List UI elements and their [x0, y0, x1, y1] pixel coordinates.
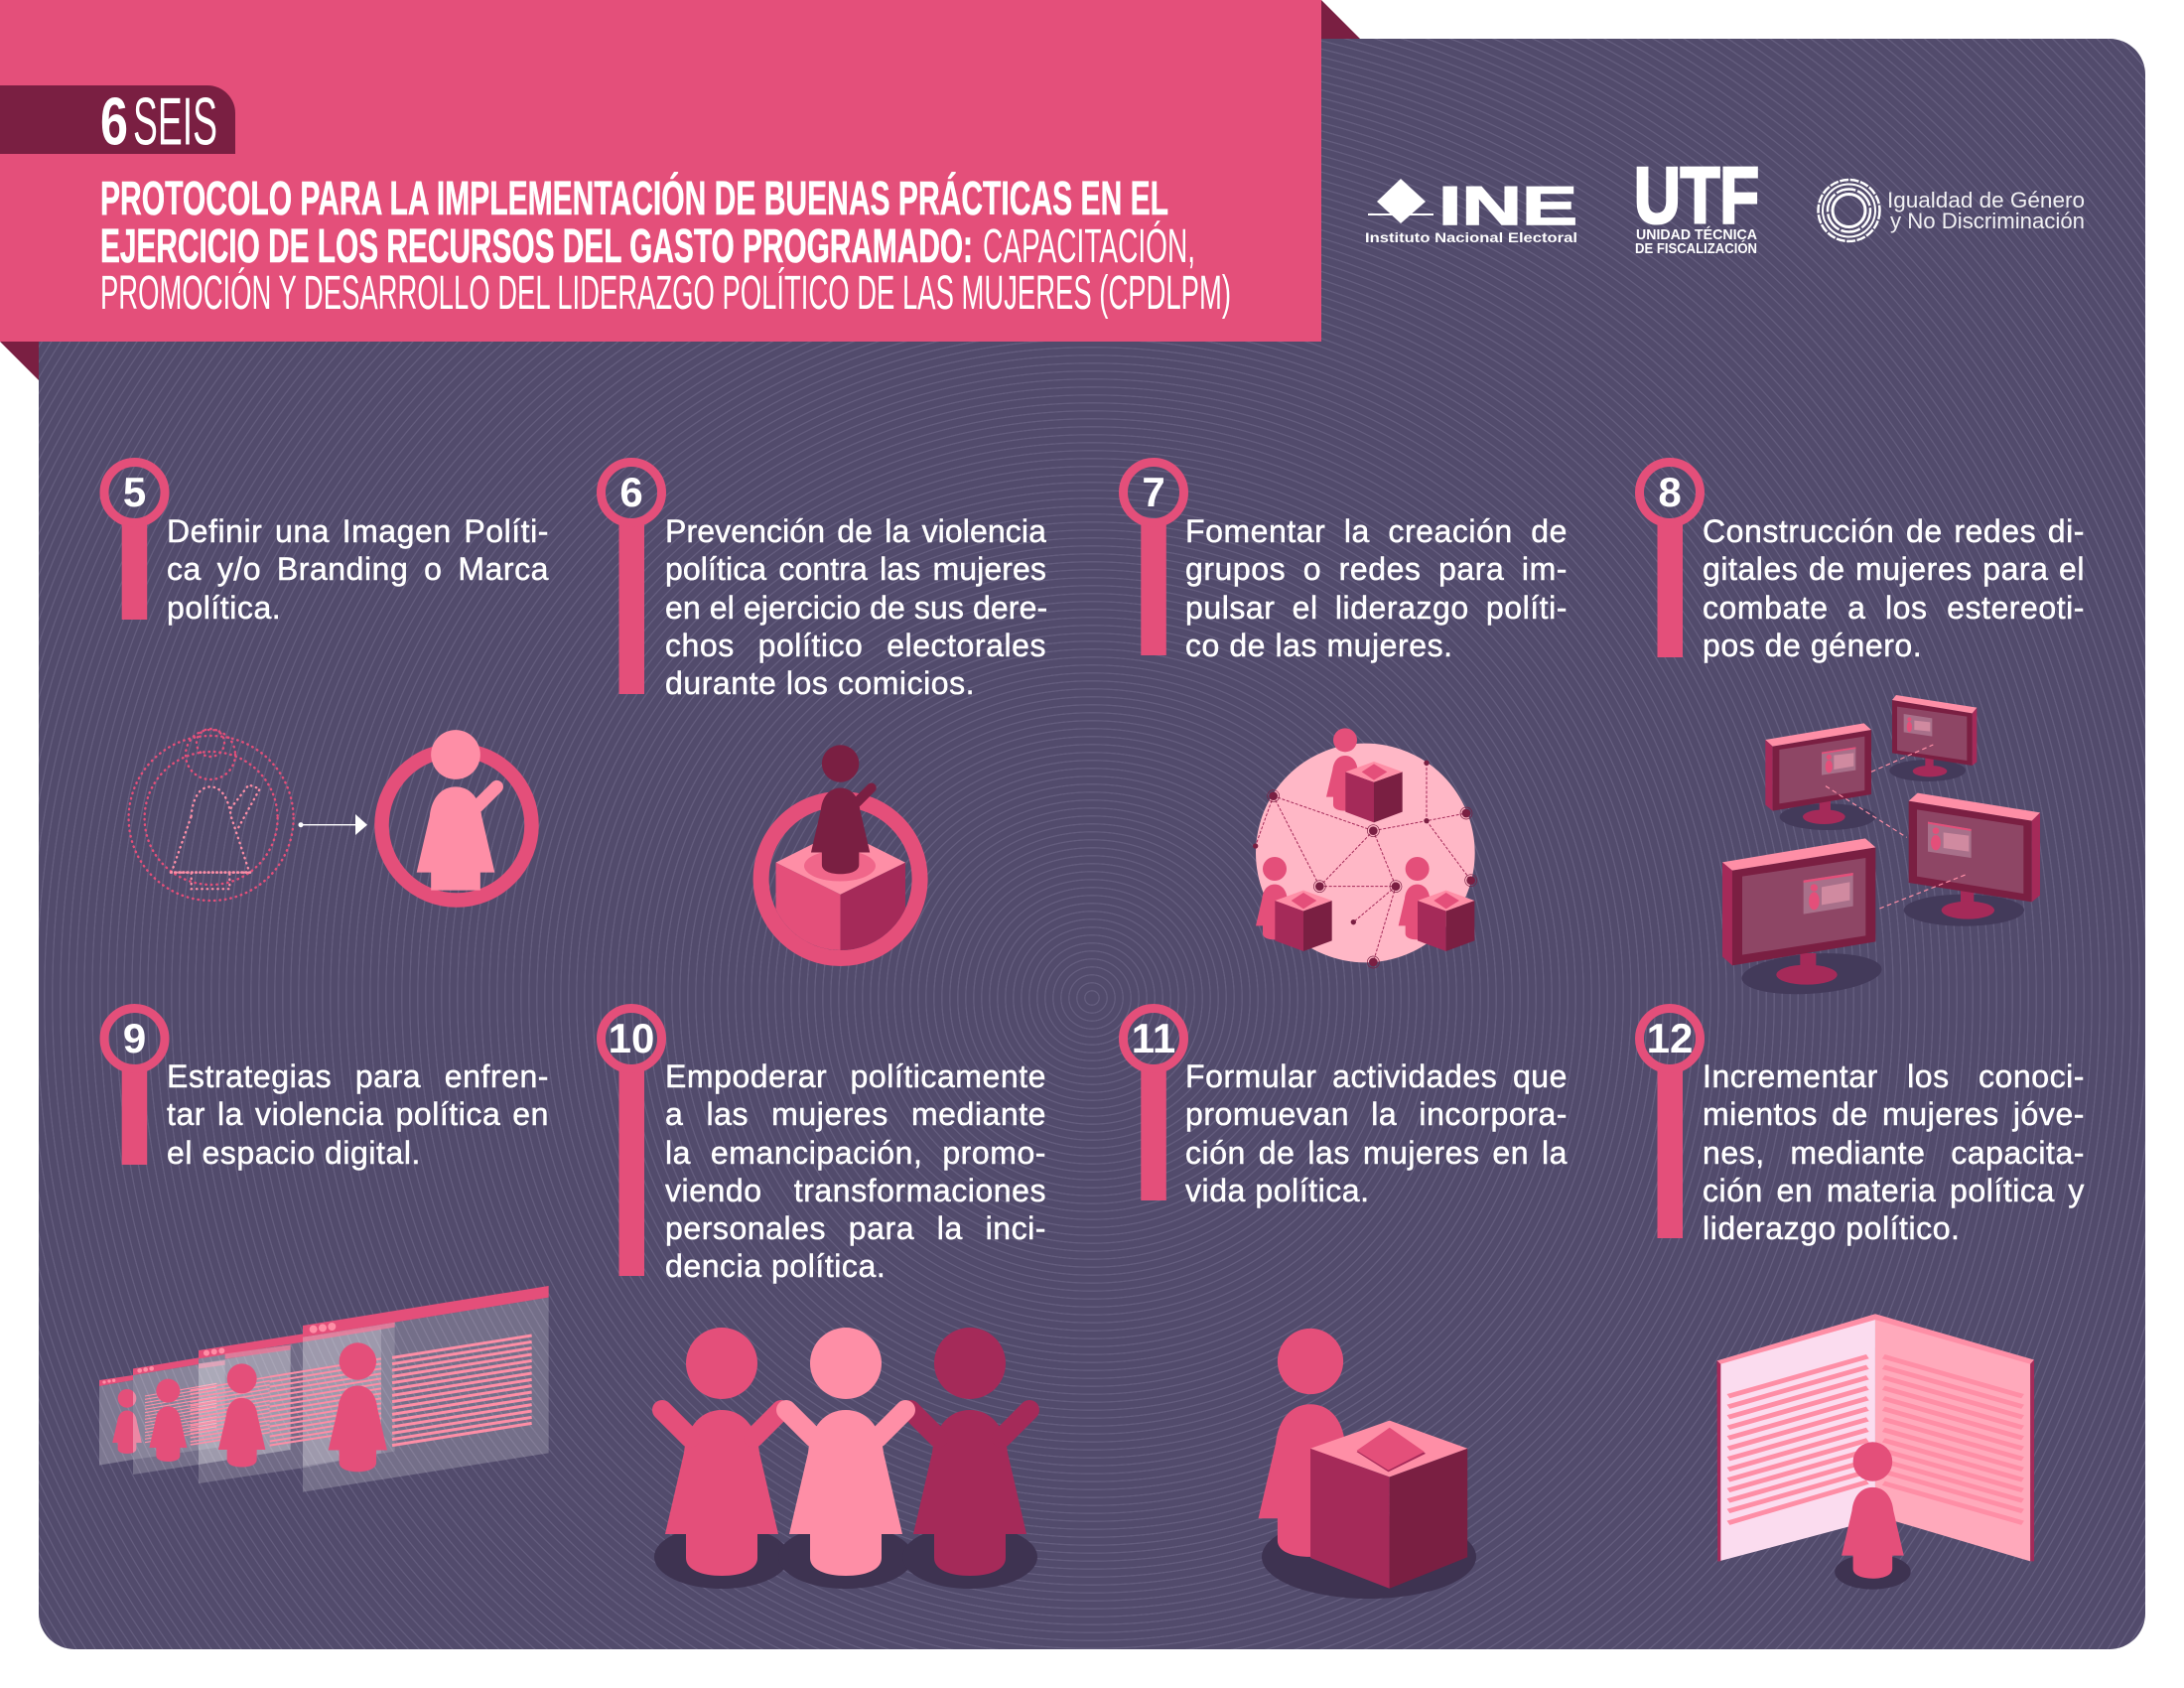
logo: INE: Instituto Nacional Electoral — [1365, 229, 1577, 245]
logo: INE: INE — [1438, 175, 1577, 236]
window 1 — [270, 1286, 549, 1492]
text 5: ca y/o Branding o Marca — [167, 551, 549, 587]
text 10: Empoderar políticamente — [665, 1058, 1046, 1094]
text 10: a las mujeres mediante — [665, 1096, 1046, 1132]
pin 6: 6 — [619, 469, 643, 515]
text 5: Definir una Imagen Políti- — [167, 513, 549, 549]
arrow — [298, 814, 367, 835]
item 10 — [602, 1009, 1046, 1589]
monitor top left — [1765, 723, 1871, 824]
pin 12 — [1640, 1009, 1700, 1238]
text 9: Estrategias para enfren- — [167, 1058, 549, 1094]
text 11: promuevan la incorpora- — [1185, 1096, 1568, 1132]
text 12: mientos de mujeres jóve- — [1703, 1096, 2085, 1132]
title: EJERCICIO DE LOS RECURSOS DEL GASTO PROGRAMADO: — [100, 220, 973, 273]
text 12 — [1703, 1057, 2085, 1250]
logo: UTF: UNIDAD TÉCNICA — [1636, 226, 1757, 243]
text 10: viendo transformaciones — [665, 1173, 1046, 1208]
text 5 — [167, 512, 549, 628]
text 6: política contra las mujeres — [665, 551, 1046, 587]
icon: three women arms raised — [654, 1328, 1037, 1589]
icon: woman in ring — [381, 730, 532, 900]
item 8 — [1640, 463, 2085, 999]
woman light pink — [786, 1328, 905, 1576]
pin 8: 8 — [1658, 469, 1682, 515]
text 10: personales para la inci- — [665, 1210, 1046, 1246]
fold: bottom left of banner — [0, 342, 39, 380]
item 7 — [1124, 463, 1568, 968]
pin 11 — [1124, 1009, 1183, 1200]
pin 5 — [104, 463, 165, 620]
icon: connected monitors — [1722, 695, 2040, 999]
text 9: el espacio digital. — [167, 1135, 421, 1171]
icon: woman at ballot box — [1259, 1329, 1476, 1599]
monitor top right — [1892, 695, 1977, 776]
pin 11: 11 — [1132, 1015, 1175, 1061]
text 6: en el ejercicio de sus dere- — [665, 590, 1046, 626]
text 12: liderazgo político. — [1703, 1210, 1960, 1246]
text 6: chos político electorales — [665, 628, 1046, 663]
text 8: Construcción de redes di- — [1703, 513, 2085, 549]
title: CAPACITACIÓN, — [983, 219, 1195, 273]
item 6 — [602, 463, 1046, 958]
pin 5: 5 — [123, 469, 146, 515]
text 8: pos de género. — [1703, 628, 1922, 663]
text 7: Fomentar la creación de — [1185, 513, 1568, 549]
text 7 — [1185, 512, 1568, 666]
title: PROMOCIÓN Y DESARROLLO DEL LIDERAZGO POLÍTICO DE LAS MUJERES (CPDLPM) — [100, 266, 1231, 320]
icon: browser windows with women — [99, 1286, 549, 1492]
window 4 — [99, 1375, 142, 1466]
text 12: ción en materia política y — [1703, 1173, 2085, 1208]
text 5: política. — [167, 590, 281, 626]
pin 6 — [602, 463, 661, 694]
text 12: nes, mediante capacita- — [1703, 1135, 2085, 1171]
text 9: tar la violencia política en — [167, 1096, 549, 1132]
text 10 — [665, 1057, 1046, 1288]
text 7: grupos o redes para im- — [1185, 551, 1568, 587]
text 6 — [665, 512, 1046, 705]
pin 12: 12 — [1647, 1015, 1693, 1061]
text 11: vida política. — [1185, 1173, 1370, 1208]
logo: UTF: UTF — [1634, 151, 1759, 239]
text 11: Formular actividades que — [1185, 1058, 1568, 1094]
item 12 — [1640, 1009, 2085, 1590]
text 6: Prevención de la violencia — [665, 513, 1046, 549]
text 7: pulsar el liderazgo políti- — [1185, 590, 1568, 626]
title: PROTOCOLO PARA LA IMPLEMENTACIÓN DE BUENAS PRÁCTICAS EN EL — [100, 171, 1168, 225]
icon: woman on podium in ring — [761, 745, 920, 958]
item 5 — [104, 463, 549, 901]
window 3 — [133, 1348, 291, 1475]
text 9 — [167, 1057, 549, 1173]
text 8: gitales de mujeres para el — [1703, 551, 2085, 587]
logo: INE — [1365, 175, 1577, 245]
icon: dotted silhouette — [129, 729, 294, 901]
text 6: durante los comicios. — [665, 665, 975, 701]
woman dark pink — [910, 1328, 1029, 1576]
item 11 — [1124, 1009, 1568, 1599]
pin 7: 7 — [1142, 469, 1165, 515]
pin 10 — [602, 1009, 661, 1276]
logo: Igualdad de Género — [1819, 180, 2085, 241]
pin 10: 10 — [609, 1015, 654, 1061]
woman pink — [662, 1328, 781, 1576]
pin 8 — [1640, 463, 1700, 657]
text 8 — [1703, 512, 2085, 666]
icon: network of women and ballot boxes — [1253, 728, 1477, 968]
text 11: ción de las mujeres en la — [1185, 1135, 1568, 1171]
logo: Igualdad de Género: Igualdad de Género — [1887, 188, 2085, 212]
window 2 — [191, 1328, 381, 1483]
item 9 — [99, 1009, 549, 1492]
tag: 6 SEIS: 6 — [100, 83, 128, 159]
logo: UTF — [1634, 151, 1759, 257]
logo: UTF: DE FISCALIZACIÓN — [1635, 239, 1757, 257]
pin 9 — [104, 1009, 165, 1165]
pin 9: 9 — [123, 1015, 146, 1061]
monitor front — [1722, 838, 1875, 985]
header banner — [0, 0, 1321, 342]
monitor right — [1909, 793, 2040, 919]
text 8: combate a los estereoti- — [1703, 590, 2085, 626]
tag: 6 SEIS — [0, 83, 235, 159]
icon: open book with woman — [1717, 1314, 2034, 1590]
text 10: la emancipación, promo- — [665, 1135, 1046, 1171]
fold: top right of banner — [1321, 0, 1360, 39]
text 12: Incrementar los conoci- — [1703, 1058, 2085, 1094]
text 10: dencia política. — [665, 1248, 886, 1284]
text 7: co de las mujeres. — [1185, 628, 1453, 663]
title — [100, 171, 1231, 320]
pin 7 — [1124, 463, 1183, 655]
logo: Igualdad de Género: y No Discriminación — [1890, 209, 2085, 233]
text 11 — [1185, 1057, 1568, 1211]
tag: 6 SEIS: SEIS — [133, 83, 217, 159]
